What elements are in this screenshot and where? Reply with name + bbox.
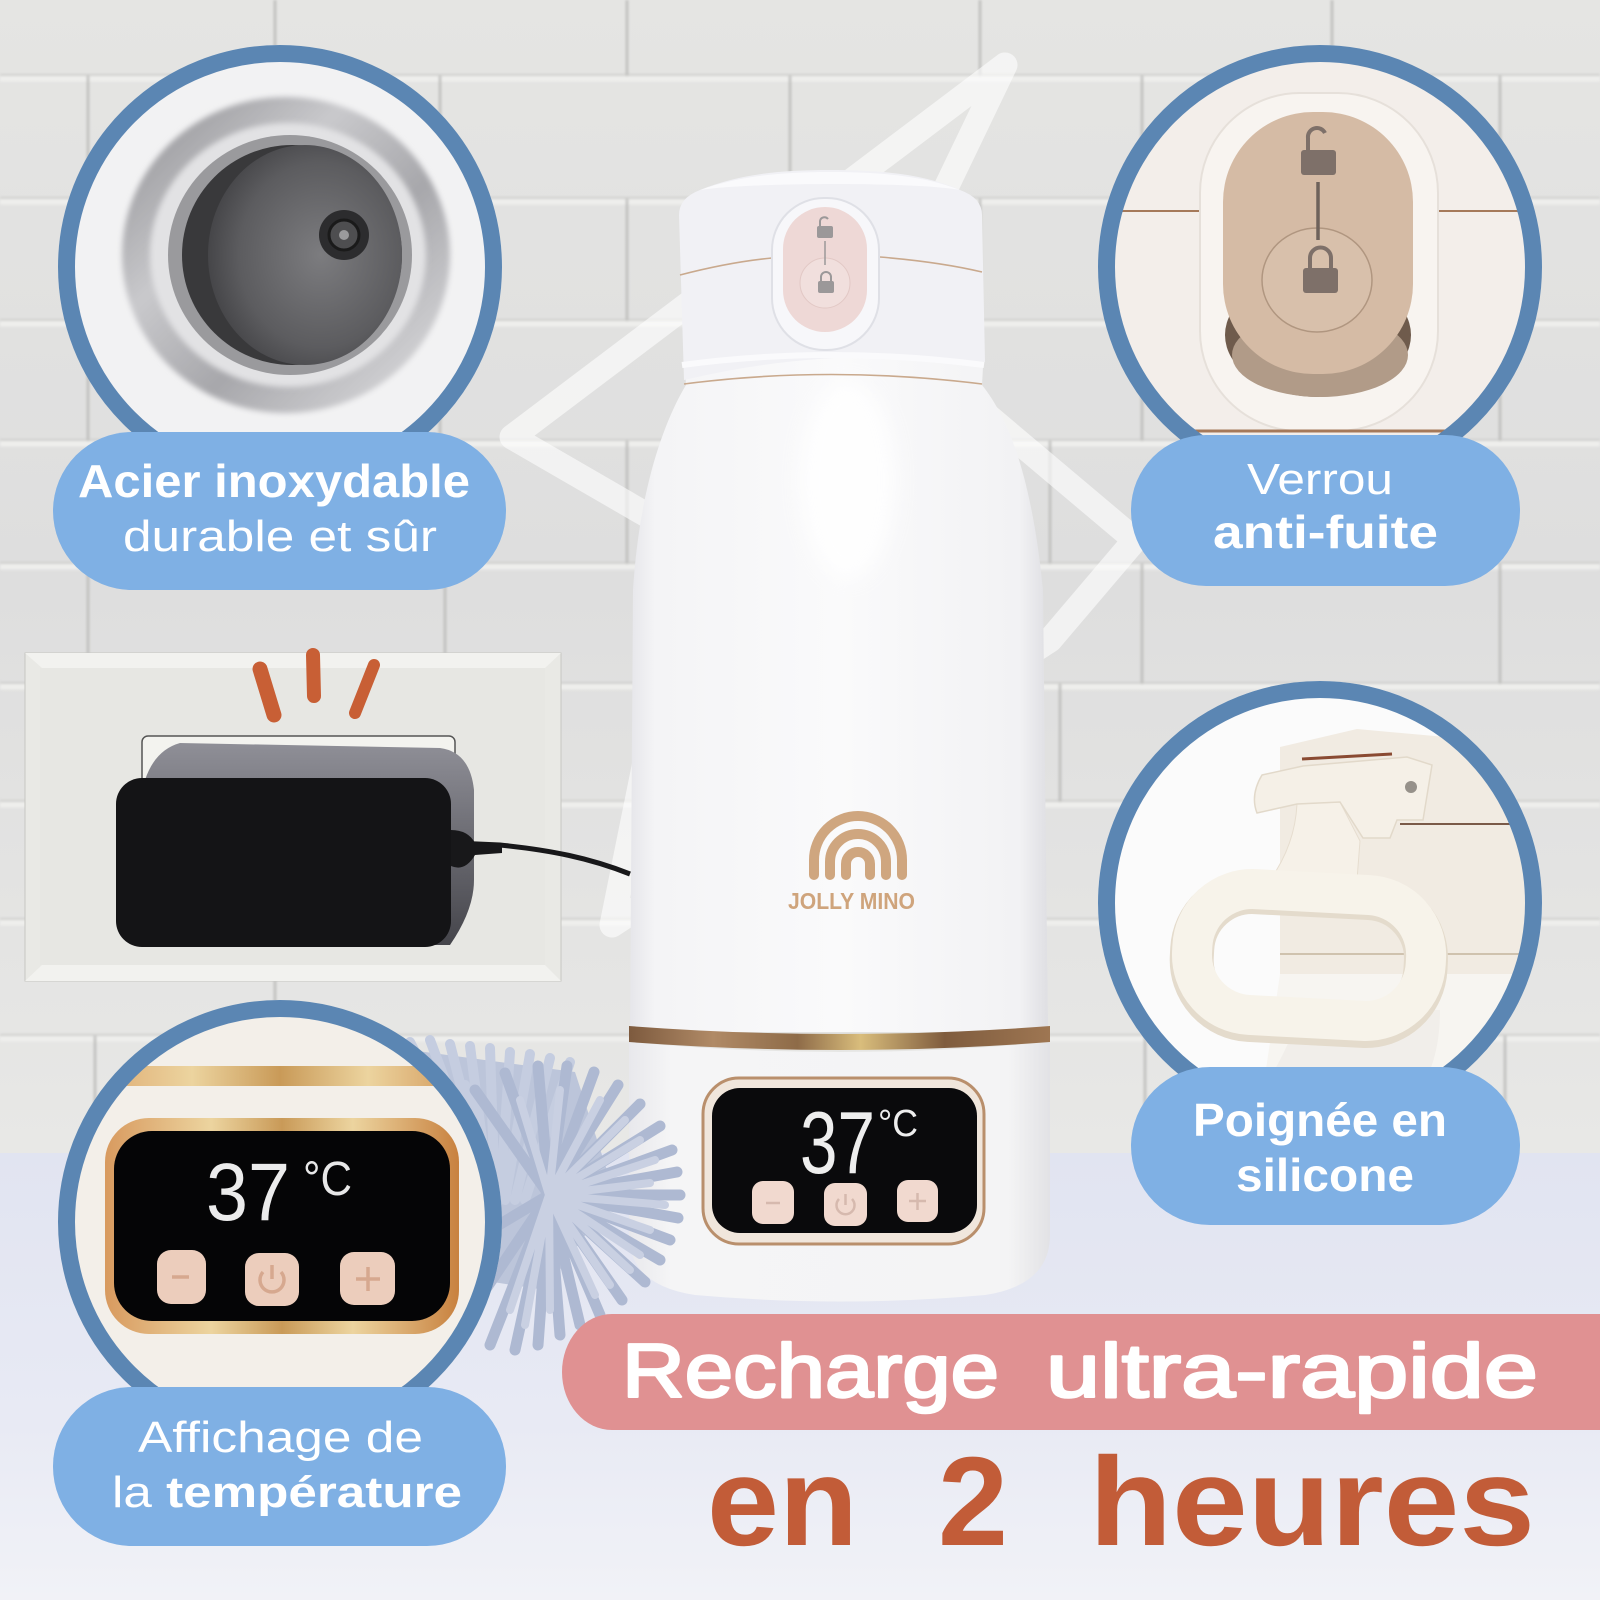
- steel interior: [122, 97, 450, 413]
- banner text: ultra-rapide: [1046, 1329, 1538, 1414]
- handle hinge: [1254, 757, 1432, 838]
- table surface: [0, 1153, 1600, 1600]
- label bold: Acier inoxydable: [78, 455, 470, 507]
- feature: temperature display: [53, 1000, 506, 1546]
- pill: anti-leak: [1131, 435, 1520, 586]
- adapter side: [145, 743, 474, 945]
- lock open icon: [817, 217, 833, 238]
- bottle brush: [400, 1040, 680, 1350]
- open padlock: [1301, 128, 1336, 175]
- charger cable: [455, 843, 630, 874]
- pill: temperature: [53, 1387, 506, 1546]
- feature: stainless steel: [53, 45, 506, 590]
- headline: duration: heures: [1089, 1431, 1535, 1572]
- label line 1: Poignée en: [1193, 1094, 1447, 1146]
- lid seam lines: [680, 257, 982, 384]
- label regular: durable et sûr: [123, 512, 437, 561]
- lock closed icon: [818, 272, 834, 293]
- lid top rim: [700, 172, 960, 190]
- wall plate: [25, 653, 561, 981]
- logo text: JOLLY MINO: [788, 888, 915, 914]
- power button: [245, 1253, 299, 1306]
- bottle base: [629, 1042, 1050, 1302]
- lock button: [783, 207, 867, 332]
- temperature reading: 37: [800, 1093, 875, 1192]
- plug panel: [25, 653, 630, 981]
- bottle lid: [679, 170, 985, 380]
- adapter front: [116, 778, 451, 947]
- bottle: [629, 170, 1050, 1302]
- closed padlock: [1303, 248, 1338, 293]
- headline: duration: 2: [938, 1431, 1008, 1572]
- banner text: [622, 1329, 1538, 1414]
- circle background: [58, 1000, 502, 1444]
- plus button: [897, 1180, 938, 1222]
- lid collar: [682, 355, 984, 365]
- degree unit: °C: [878, 1103, 918, 1145]
- cable strain relief: [451, 830, 502, 868]
- lock link line: [824, 241, 826, 265]
- label line 1: Affichage de: [138, 1413, 423, 1462]
- plus button: [340, 1252, 395, 1305]
- display close-up: [105, 1066, 459, 1334]
- logo rainbow: [814, 816, 902, 875]
- headline: duration: [707, 1431, 1535, 1572]
- pill: stainless steel: [53, 432, 506, 590]
- label bold: anti-fuite: [1213, 506, 1438, 558]
- handle loop: [1189, 886, 1429, 1024]
- degree unit: °C: [303, 1153, 352, 1206]
- label regular: Verrou: [1247, 455, 1393, 504]
- gold band: [629, 1026, 1050, 1050]
- pill: silicone handle: [1131, 1067, 1520, 1225]
- plate face: [25, 653, 561, 981]
- circle background: [1098, 681, 1542, 1125]
- lock circle: [800, 258, 850, 308]
- banner background: [562, 1314, 1600, 1430]
- circle ring: [58, 45, 502, 489]
- feature: anti-leak lock: [1098, 45, 1542, 586]
- temperature reading: 37: [206, 1147, 290, 1238]
- bottle body: [630, 350, 1048, 1032]
- power button: [824, 1183, 867, 1226]
- lock ring: [772, 198, 879, 350]
- minus button: [752, 1181, 794, 1224]
- circle background: [1098, 45, 1542, 489]
- body highlight: [800, 380, 896, 580]
- headline banner: [562, 1314, 1600, 1430]
- feature: silicone handle: [1098, 681, 1560, 1225]
- socket plate: [142, 736, 455, 796]
- handle loop shadow: [1189, 889, 1429, 1029]
- brick wall background: [0, 0, 1600, 1160]
- neon star outline: [512, 65, 1135, 925]
- impact marks: [260, 655, 374, 715]
- bottle display: [703, 1078, 984, 1244]
- handle neck: [1276, 805, 1360, 874]
- headline: duration: en: [707, 1431, 858, 1572]
- handle close-up: [1170, 729, 1525, 1067]
- lock close-up: [1100, 93, 1540, 431]
- banner text: Recharge: [622, 1329, 999, 1414]
- label line 2: silicone: [1236, 1149, 1414, 1201]
- minus button: [157, 1250, 206, 1304]
- label line 2: la température: [112, 1468, 462, 1517]
- hinge screw: [1405, 781, 1417, 793]
